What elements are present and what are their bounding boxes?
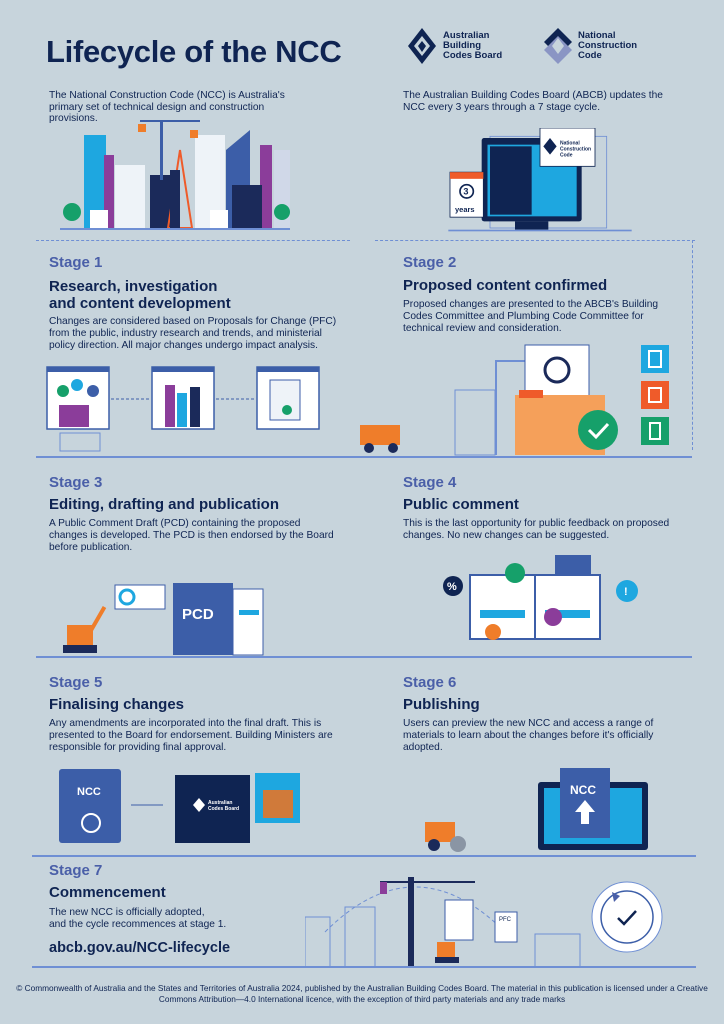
stage 3 heading: Editing, drafting and publication bbox=[49, 496, 279, 513]
stage 5 label: Stage 5 bbox=[49, 674, 102, 691]
icon: cycle check bbox=[592, 882, 662, 952]
logo: NCC: Construction bbox=[578, 40, 637, 51]
stage 6 label: Stage 6 bbox=[403, 674, 456, 691]
stage 1 text: Changes are considered based on Proposals for Change (PFC) from the public, industry research and trends, and ministerial policy direction. All major changes undergo impact analysis. bbox=[49, 316, 336, 351]
stage 4 bbox=[403, 474, 669, 541]
stage 7 heading: Commencement bbox=[49, 884, 166, 901]
illustration: monitor with 3 years calendar bbox=[448, 128, 632, 232]
illustration: monitor with 3 years calendar: National bbox=[560, 141, 580, 147]
stage 7 bbox=[49, 862, 230, 956]
stage 3 text: A Public Comment Draft (PCD) containing the proposed changes is developed. The PCD is then endorsed by the Board before publication. bbox=[49, 518, 334, 553]
stage 6 bbox=[403, 674, 654, 753]
stage 7 text: and the cycle recommences at stage 1. bbox=[49, 919, 226, 930]
stage 3 label: Stage 3 bbox=[49, 474, 102, 491]
stage 5 bbox=[49, 674, 333, 753]
illustration: monitor with 3 years calendar: Code bbox=[560, 152, 573, 158]
logo: NCC bbox=[544, 28, 637, 64]
stage 7 illustration: crane construction site bbox=[305, 877, 580, 966]
stage 5 illustration: NCC book and ABCB board: NCC bbox=[77, 786, 101, 798]
stage 7 illustration: crane construction site: PFC bbox=[499, 917, 512, 923]
logo: ABCB: Codes Board bbox=[443, 50, 502, 61]
stage 1 bbox=[49, 254, 336, 351]
stage 1 label: Stage 1 bbox=[49, 254, 102, 271]
stage 5 illustration: NCC book and ABCB board bbox=[59, 769, 300, 843]
stage 2 illustration: folder with check bbox=[360, 344, 669, 456]
logo: NCC: National bbox=[578, 30, 615, 41]
intro text right: The Australian Building Codes Board (ABCB) updates the NCC every 3 years through a 7 stage cycle. bbox=[403, 90, 663, 112]
title: Lifecycle of the NCC bbox=[46, 34, 341, 69]
stage 2 label: Stage 2 bbox=[403, 254, 456, 271]
illustration: monitor with 3 years calendar: 3 bbox=[463, 187, 468, 197]
stage 1 illustrations bbox=[46, 366, 320, 452]
stage 7 label: Stage 7 bbox=[49, 862, 102, 879]
stage 2 bbox=[403, 254, 658, 334]
stage 4 heading: Public comment bbox=[403, 496, 519, 513]
website link: abcb.gov.au/NCC-lifecycle bbox=[49, 940, 230, 956]
dividers bbox=[36, 240, 350, 241]
stage 4 illustration: open book: % bbox=[447, 581, 457, 593]
stage 2 text: Proposed changes are presented to the ABCB's Building Codes Committee and Plumbing Code Committee for technical review and consideration. bbox=[403, 299, 658, 334]
stage 6 illustration: monitor with NCC upload bbox=[425, 768, 648, 852]
intro text left: The National Construction Code (NCC) is Australia's primary set of technical design and construction provisions. bbox=[49, 90, 285, 124]
stage 5 text: Any amendments are incorporated into the final draft. This is presented to the Board for endorsement. Building Ministers are responsible for providing final approval. bbox=[49, 718, 333, 753]
stage 3 illustration: PCD book: PCD bbox=[182, 606, 214, 623]
stage 6 heading: Publishing bbox=[403, 696, 480, 713]
stage 1 heading bbox=[49, 278, 231, 312]
stage 1 heading: and content development bbox=[49, 295, 231, 312]
logo: ABCB: Australian bbox=[443, 30, 489, 41]
stage 6 illustration: monitor with NCC upload: NCC bbox=[570, 783, 596, 797]
stage 4 text: This is the last opportunity for public feedback on proposed changes. No new changes can be suggested. bbox=[403, 518, 669, 541]
logo: ABCB bbox=[408, 28, 502, 64]
stage 7 text: The new NCC is officially adopted, bbox=[49, 907, 205, 918]
stage 4 label: Stage 4 bbox=[403, 474, 456, 491]
logo: NCC: Code bbox=[578, 50, 602, 61]
stage 3 bbox=[49, 474, 334, 553]
stage 5 illustration: NCC book and ABCB board: Codes Board bbox=[208, 806, 239, 812]
stage 7 text bbox=[49, 907, 226, 930]
stage 2 heading: Proposed content confirmed bbox=[403, 277, 607, 294]
illustration: city skyline bbox=[60, 120, 290, 230]
stage 6 text: Users can preview the new NCC and access a range of materials to learn about the changes before it's officially adopted. bbox=[403, 718, 653, 753]
logo: ABCB: Building bbox=[443, 40, 481, 51]
stage 4 illustration: open book: ! bbox=[624, 586, 628, 598]
stage 1 heading: Research, investigation bbox=[49, 278, 217, 295]
stage 4 illustration: open book bbox=[443, 555, 638, 640]
stage 5 illustration: NCC book and ABCB board: Australian bbox=[208, 800, 232, 806]
illustration: monitor with 3 years calendar: years bbox=[455, 205, 475, 214]
stage 5 heading: Finalising changes bbox=[49, 696, 184, 713]
illustration: monitor with 3 years calendar: Construction bbox=[560, 147, 591, 153]
footer: © Commonwealth of Australia and the States and Territories of Australia 2024, published by the Australian Building Codes Board. The material in this publication is licensed under a Creative Commons Attribution—4.0 International licence, with the exception of third party materials and any trade marks bbox=[16, 983, 708, 1004]
stage 3 illustration: PCD book bbox=[63, 583, 264, 656]
